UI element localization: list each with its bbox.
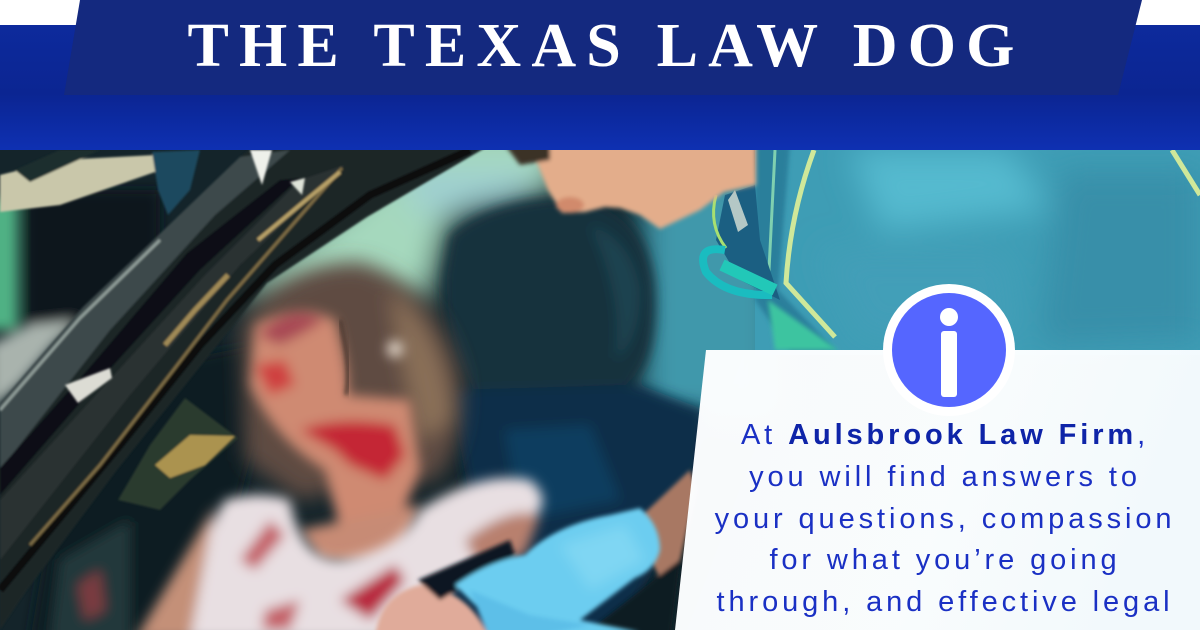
woman hair [240,262,462,500]
car door pillar [0,145,490,630]
background window and interior [240,150,755,422]
paramedic shirt [755,145,1200,355]
info text: through, and effective legal [717,586,1173,618]
info text: your questions, compassion [715,503,1175,535]
gloved hand and woman hand [375,508,660,630]
title: THE TEXAS LAW DOG [188,12,1024,80]
info text: you will find answers to [749,461,1141,493]
crash debris and broken glass [0,150,305,510]
seat headrest and backrest [420,197,705,630]
reflective strap [768,150,1200,350]
photo: paramedic helping crash victim [0,150,1200,630]
info text [714,419,1175,618]
info text: for what you’re going [769,544,1121,576]
woman torso [135,478,542,630]
header banner [0,0,1200,150]
forearm [598,468,692,630]
info text: At Aulsbrook Law Firm, [741,419,1149,451]
paramedic face [505,145,756,229]
woman face and neck [250,311,420,570]
stethoscope [703,185,780,300]
